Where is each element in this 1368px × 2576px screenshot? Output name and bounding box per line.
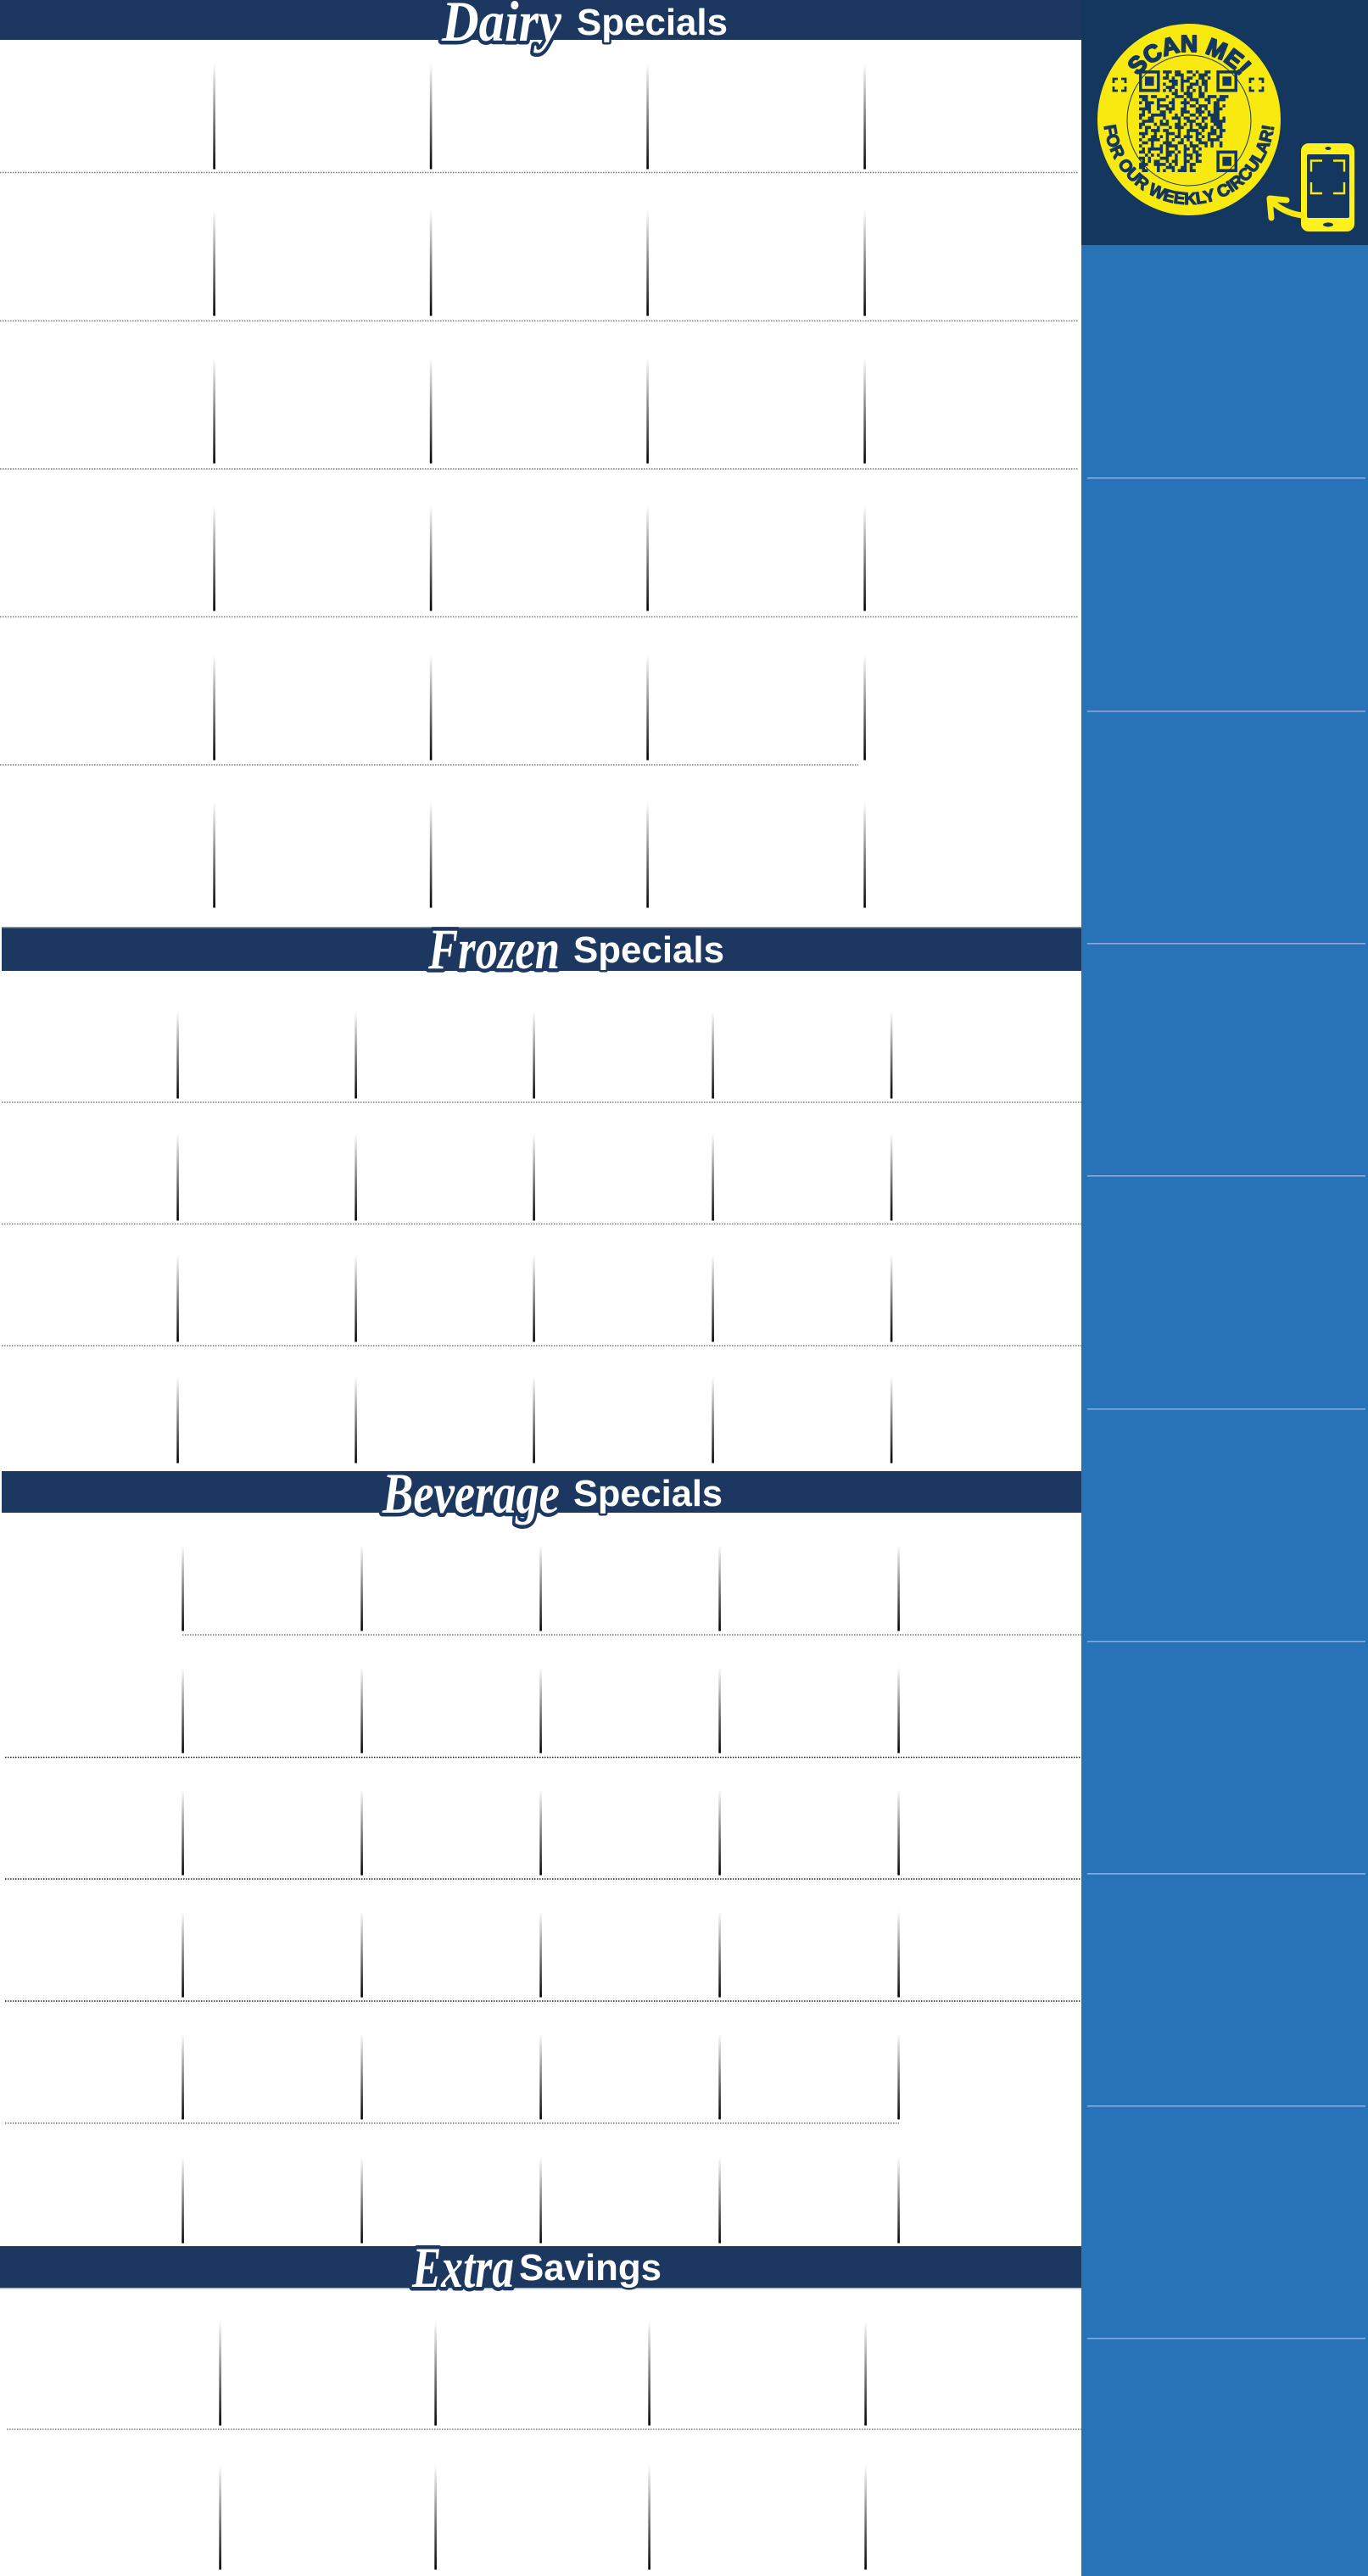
- beverage column rules: [181, 1545, 900, 2244]
- heading: beverage specials: Beverage: [382, 1461, 560, 1525]
- heading: frozen specials: Frozen: [427, 917, 560, 981]
- panel: extra savings: [0, 2235, 1081, 2569]
- sidebar panel: blue column: [1081, 245, 1368, 2576]
- frozen row dividers: [2, 1102, 1081, 1346]
- panel: dairy specials: [0, 0, 1081, 907]
- beverage row dividers: [5, 1635, 1081, 2123]
- badge text: scan me: SCAN ME!: [1128, 35, 1252, 75]
- badge text: for our weekly circular: FOR OUR WEEKLY CIRCULAR!: [1103, 124, 1274, 205]
- heading: extra savings: Savings: [519, 2247, 662, 2289]
- extra savings row divider: [7, 2428, 1081, 2430]
- QR code: [1139, 72, 1236, 170]
- icon: phone: [1301, 143, 1354, 231]
- extra savings column rules: [219, 2320, 867, 2569]
- arrow: phone to QR code: [1270, 198, 1302, 218]
- heading: extra savings: [0, 2235, 1081, 2300]
- heading: beverage specials: [2, 1461, 1081, 1525]
- heading: dairy specials: [0, 0, 1081, 53]
- panel: frozen specials: [2, 917, 1081, 1464]
- heading: dairy specials: Specials: [577, 2, 728, 43]
- yellow QR badge: [1097, 24, 1281, 215]
- panel: beverage specials: [2, 1461, 1081, 2244]
- icon: right scan bracket: [1250, 79, 1263, 91]
- panel: scan me QR callout: [1081, 0, 1368, 245]
- dairy column rules: [213, 63, 866, 907]
- heading: extra savings: Extra: [411, 2235, 514, 2300]
- frozen column rules: [176, 1011, 892, 1464]
- heading: frozen specials: [2, 917, 1081, 981]
- heading: frozen specials: Specials: [573, 929, 724, 971]
- dairy row dividers: [0, 173, 1078, 765]
- icon: left scan bracket: [1114, 79, 1125, 91]
- heading: beverage specials: Specials: [573, 1473, 723, 1514]
